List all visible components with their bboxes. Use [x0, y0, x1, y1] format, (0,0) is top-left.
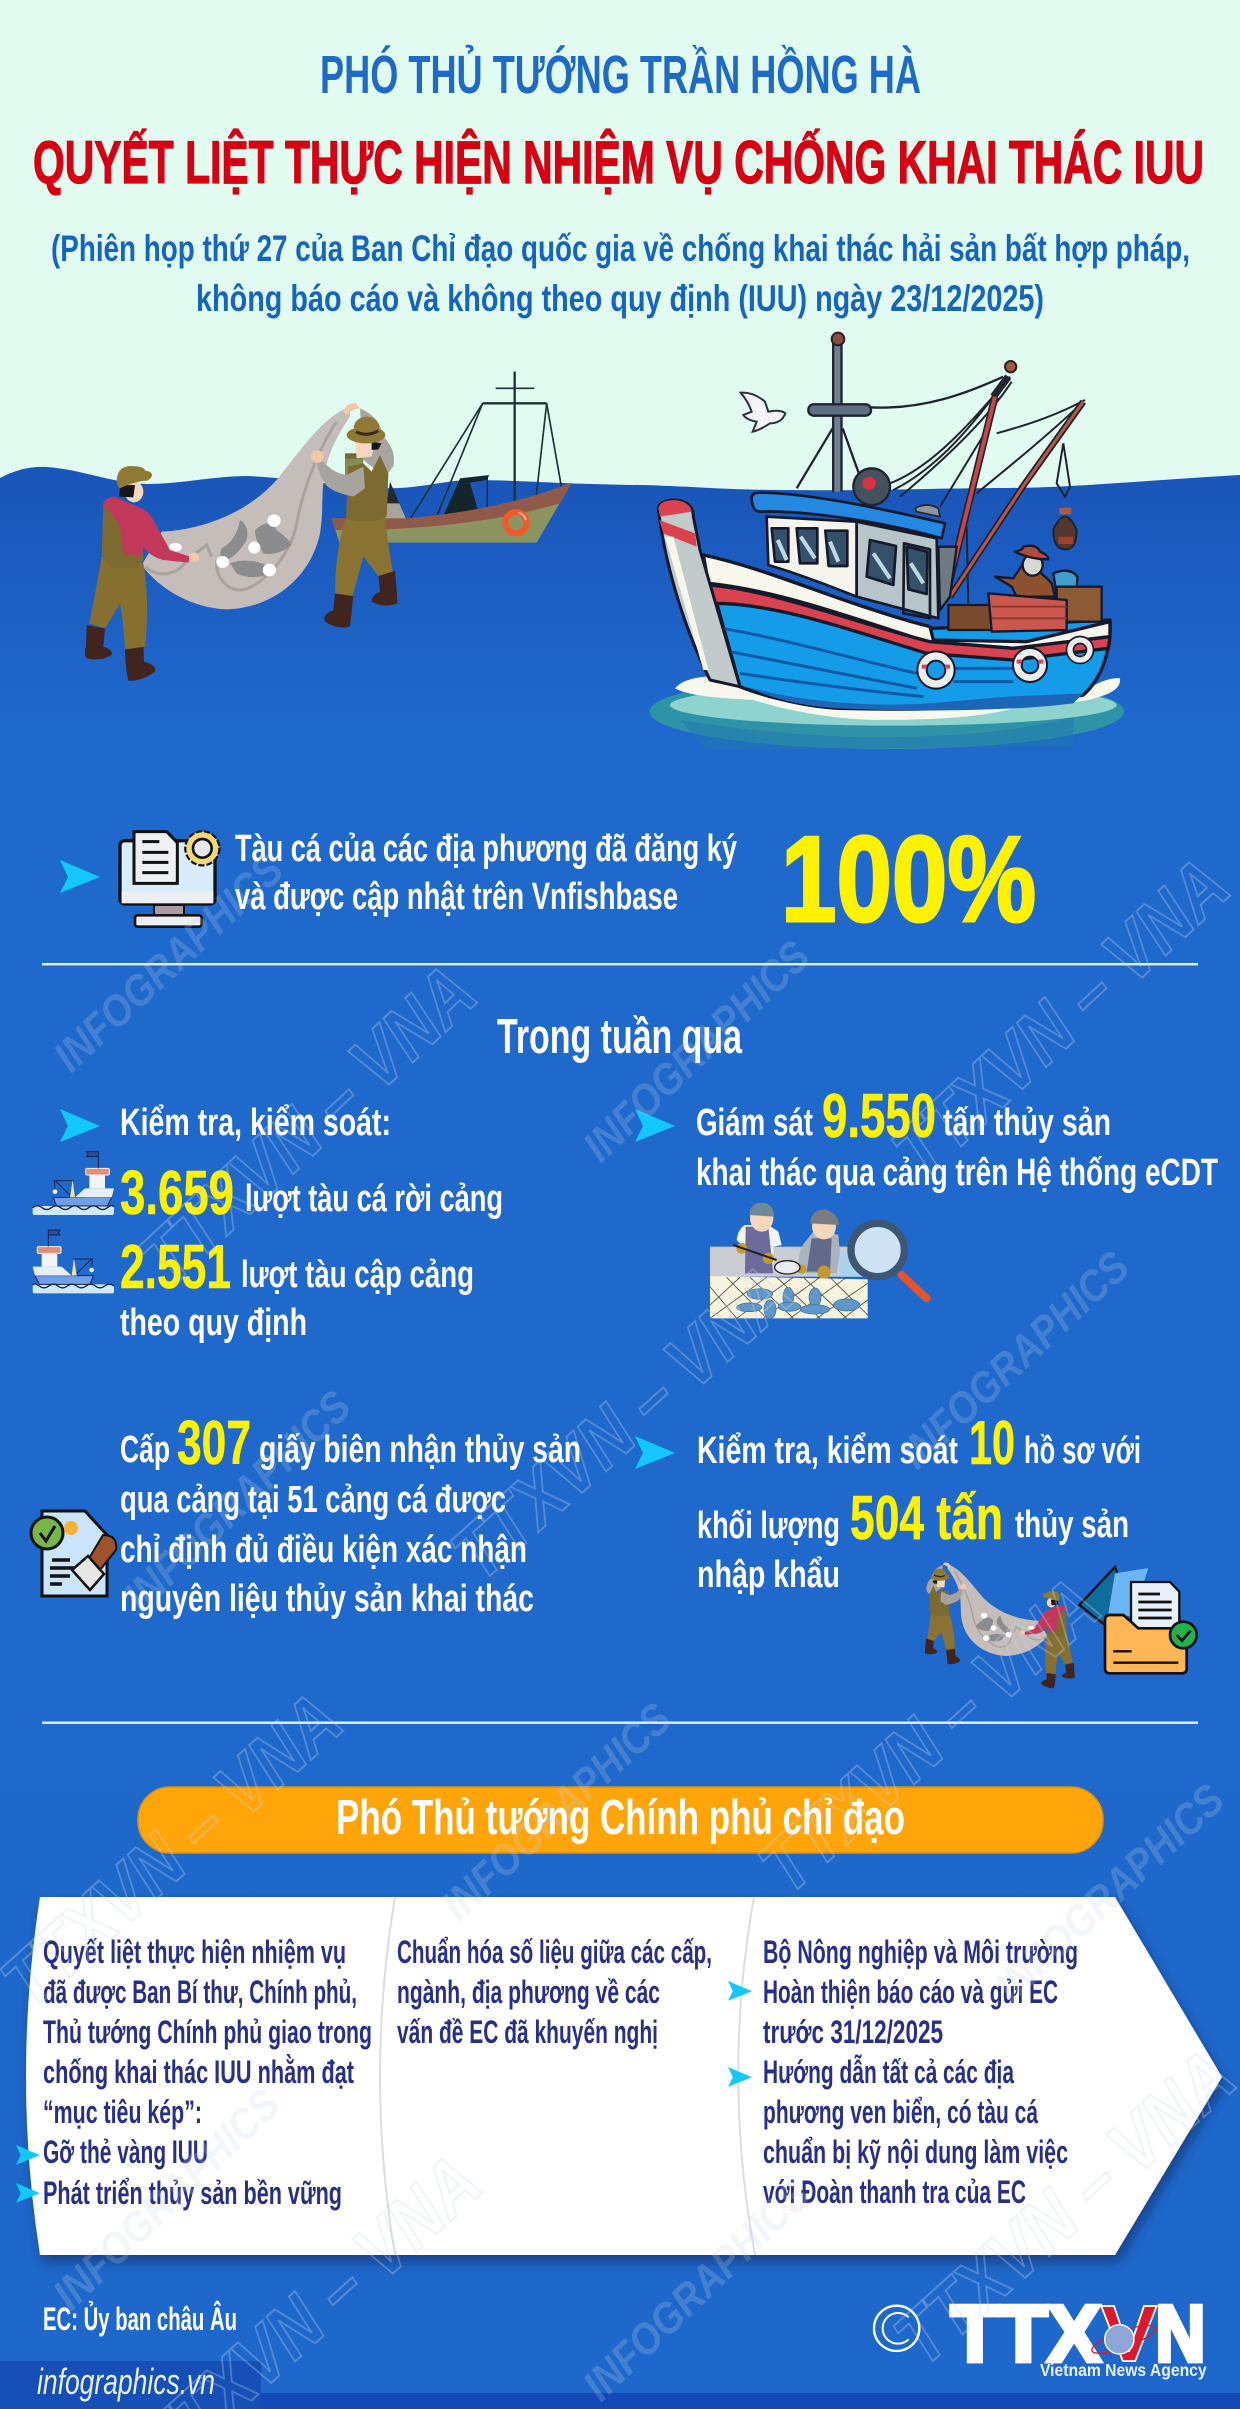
text: import dossiers: 504 tấn	[850, 1484, 1003, 1553]
icon: fishers with net and magnifier	[710, 1203, 927, 1319]
number: departures	[120, 1159, 503, 1228]
panel: seafood receipts	[31, 1409, 581, 1620]
text: receipts: nguyên liệu thủy sản khai thác	[120, 1578, 534, 1620]
text: receipts	[120, 1409, 581, 1620]
column 3: ministry tasks: Bộ Nông nghiệp và Môi trường	[763, 1934, 1078, 1970]
text: INFOGRAPHICS	[44, 845, 293, 1081]
column 2: standardize data: ngành, địa phương về các	[397, 1974, 660, 2010]
number: arrivals	[120, 1233, 474, 1344]
icon: radar light	[853, 468, 890, 505]
panel: three directions arrow box	[16, 1897, 1222, 2255]
illustration: large blue fishing boat	[649, 333, 1124, 750]
text: receipts: 307	[177, 1409, 251, 1478]
column 2: standardize data	[397, 1934, 712, 2050]
text: TTXVN – VNA	[124, 949, 492, 1301]
icon: seagull	[741, 393, 785, 432]
subtitle	[51, 228, 1190, 319]
column 3: ministry tasks: Hướng dẫn tất cả các địa	[763, 2054, 1014, 2090]
logo: TTXVN Vietnam News Agency	[874, 2289, 1207, 2380]
text: INFOGRAPHICS	[115, 1382, 360, 1621]
text: receipts: qua cảng tại 51 cảng cá được	[120, 1479, 506, 1521]
number: arrivals: lượt tàu cập cảng	[241, 1254, 474, 1296]
number: departures: 3.659	[120, 1159, 234, 1228]
panel: monitoring via eCDT	[635, 1082, 1218, 1319]
icon: folder with documents and check	[1079, 1567, 1197, 1673]
panel: import dossiers	[635, 1409, 1197, 1688]
text: TTXVN – VNA	[743, 1562, 1116, 1910]
column 2: standardize data: vấn đề EC đã khuyến nghị	[397, 2014, 658, 2050]
logo: TTXVN Vietnam News Agency: V	[1101, 2289, 1157, 2378]
text: import dossiers: nhập khẩu	[697, 1554, 840, 1596]
text: import dossiers: Kiểm tra, kiểm soát	[697, 1430, 958, 1472]
text: TTXVN – VNA	[435, 1249, 808, 1597]
footer strip with site name: infographics.vn	[37, 2361, 215, 2402]
text: registered vessels	[235, 828, 737, 918]
column 1: dual target: đã được Ban Bí thư, Chính phủ,	[43, 1974, 357, 2010]
column 3: ministry tasks: Hoàn thiện báo cáo và gửi EC	[763, 1974, 1058, 2010]
column 1: dual target: Thủ tướng Chính phủ giao trong	[43, 2014, 372, 2050]
icon: lifebuoys	[922, 640, 1090, 684]
text: registered vessels: và được cập nhật trên Vnfishbase	[235, 876, 678, 918]
text: INFOGRAPHICS	[890, 1242, 1139, 1478]
icon: hull	[703, 555, 1110, 710]
column 3: ministry tasks	[728, 1934, 1078, 2210]
panel: inspection and control: Kiểm tra, kiểm soát:	[120, 1102, 391, 1144]
text: import dossiers	[697, 1409, 1141, 1596]
icon: small fishermen with net	[925, 1563, 1075, 1688]
text: monitoring	[696, 1082, 1218, 1194]
column 1: dual target: Phát triển thủy sản bền vững	[43, 2175, 342, 2211]
number: departures: lượt tàu cá rời cảng	[245, 1178, 503, 1220]
footnote: EC definition: EC: Ủy ban châu Âu	[43, 2301, 237, 2337]
icon: wheelhouse	[752, 492, 945, 618]
text: monitoring: Giám sát	[696, 1102, 813, 1144]
icon: masts and rigging	[797, 340, 1085, 603]
icon: deck crates and fisherman	[948, 546, 1102, 632]
column 1: dual target: Quyết liệt thực hiện nhiệm vụ	[43, 1934, 346, 1970]
logo: TTXVN Vietnam News Agency: N	[1155, 2289, 1205, 2378]
column 1: dual target: chống khai thác IUU nhằm đạt	[43, 2054, 354, 2090]
number: arrivals: theo quy định	[120, 1302, 307, 1344]
text: import dossiers: khối lượng	[697, 1505, 840, 1547]
column 3: ministry tasks: chuẩn bị kỹ nội dung làm việc	[763, 2134, 1068, 2170]
column 1: dual target	[16, 1934, 372, 2211]
text: INFOGRAPHICS	[44, 2080, 289, 2319]
arrow bullet	[60, 1109, 100, 1142]
text: receipts: chỉ định đủ điều kiện xác nhận	[120, 1529, 527, 1571]
text: import dossiers: thủy sản	[1015, 1504, 1129, 1546]
text: INFOGRAPHICS	[574, 2171, 819, 2409]
column 1: dual target: Gỡ thẻ vàng IUU	[43, 2134, 208, 2170]
title: deputy prime minister: PHÓ THỦ TƯỚNG TRẦN HỒNG HÀ	[320, 45, 921, 105]
text: registered vessels: Tàu cá của các địa phương đã đăng ký	[235, 828, 737, 870]
icon: water under the boat	[649, 674, 1124, 750]
column 2: standardize data: Chuẩn hóa số liệu giữa các cấp,	[397, 1934, 712, 1970]
arrow bullet	[635, 1109, 675, 1142]
icon: arriving ship	[33, 1230, 114, 1293]
number: arrivals: 2.551	[120, 1233, 231, 1302]
text: receipts: giấy biên nhận thủy sản	[259, 1429, 581, 1471]
arrow bullet	[635, 1436, 675, 1469]
column 1: dual target: “mục tiêu kép”:	[43, 2094, 202, 2130]
footer strip with site name	[0, 2361, 1240, 2409]
number: 100%: 100%	[781, 811, 1036, 947]
panel: inspection and control	[33, 1102, 503, 1344]
icon: departing ship	[33, 1152, 114, 1215]
illustration: small fishing boat behind fishermen	[332, 372, 572, 543]
stat: registered vessels 100%	[60, 811, 1036, 947]
column 3: ministry tasks: với Đoàn thanh tra của EC	[763, 2174, 1026, 2210]
text: import dossiers: hồ sơ với	[1024, 1430, 1141, 1472]
illustration: two fishermen pulling a net	[85, 403, 398, 681]
text: monitoring: 9.550	[822, 1082, 936, 1151]
column 3: ministry tasks: phương ven biển, có tàu cá	[763, 2094, 1038, 2130]
column 3: ministry tasks: trước 31/12/2025	[763, 2014, 943, 2050]
icon: bow post	[658, 500, 740, 687]
white arrow box	[26, 1897, 1222, 2255]
heading: in the past week: Trong tuần qua	[497, 1010, 743, 1064]
icon: stamped document	[31, 1511, 116, 1596]
heading pill: deputy PM directions: Phó Thủ tướng Chính phủ chỉ đạo	[336, 1791, 905, 1845]
text: import dossiers: 10	[969, 1409, 1015, 1478]
logo: TTXVN Vietnam News Agency: TTX	[951, 2289, 1101, 2378]
text: receipts: Cấp	[120, 1429, 170, 1471]
heading pill: deputy PM directions	[138, 1787, 1103, 1853]
text: INFOGRAPHICS	[432, 1694, 681, 1930]
arrow bullet	[60, 860, 100, 893]
logo: TTXVN Vietnam News Agency: Vietnam News Agency	[1040, 2360, 1207, 2380]
text: INFOGRAPHICS	[574, 932, 819, 1171]
icon: computer with document and gear	[120, 832, 219, 927]
text: monitoring: tấn thủy sản	[943, 1102, 1111, 1144]
